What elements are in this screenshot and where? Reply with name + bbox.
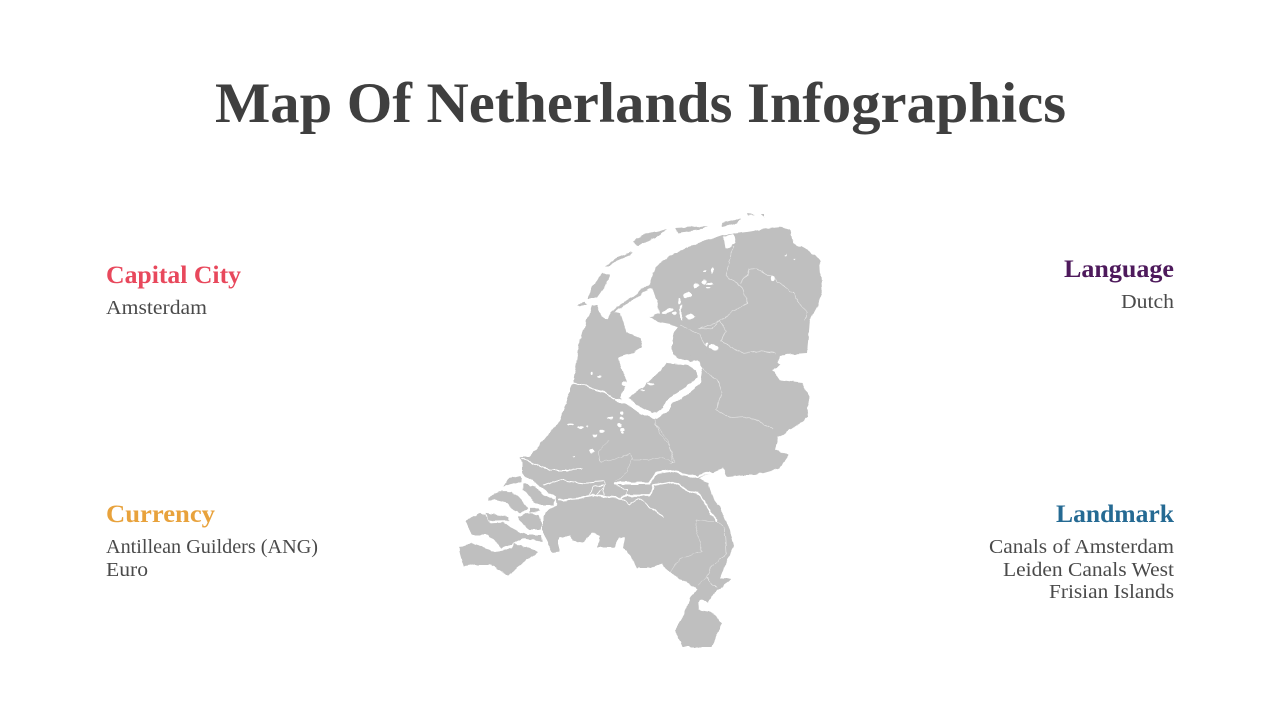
- Zeeland and Delta islands: [458, 476, 555, 575]
- text block: currency: Euro: [106, 559, 148, 581]
- text block: capital city: [106, 262, 242, 319]
- IJsselmeer water: [614, 288, 702, 419]
- text block: currency: [106, 501, 318, 581]
- northern rivers and lakes: [680, 234, 807, 428]
- text block: landmark: Frisian Islands: [1049, 581, 1174, 603]
- Noordoostpolder band: [680, 353, 707, 362]
- text block: language: [1064, 256, 1174, 313]
- mainland: [520, 227, 822, 647]
- text block: currency: Currency: [106, 501, 216, 528]
- Flevoland: [628, 363, 697, 413]
- text block: landmark: Canals of Amsterdam: [989, 536, 1174, 558]
- southern rivers: [522, 423, 726, 588]
- title: Map Of Netherlands Infographics: [215, 72, 1066, 135]
- text block: landmark: Leiden Canals West: [1003, 559, 1174, 581]
- Friesland lakes: [651, 283, 699, 322]
- text block: currency: Antillean Guilders (ANG): [106, 536, 318, 558]
- text block: language: Language: [1064, 256, 1174, 283]
- text block: landmark: [989, 501, 1174, 603]
- text block: capital city: Amsterdam: [106, 297, 207, 319]
- text block: capital city: Capital City: [106, 262, 242, 289]
- map of the Netherlands: [458, 214, 822, 647]
- central river and lakes: [567, 372, 675, 464]
- text block: landmark: Landmark: [1056, 501, 1174, 528]
- text block: language: Dutch: [1121, 291, 1174, 313]
- Frisian islands: [577, 214, 764, 307]
